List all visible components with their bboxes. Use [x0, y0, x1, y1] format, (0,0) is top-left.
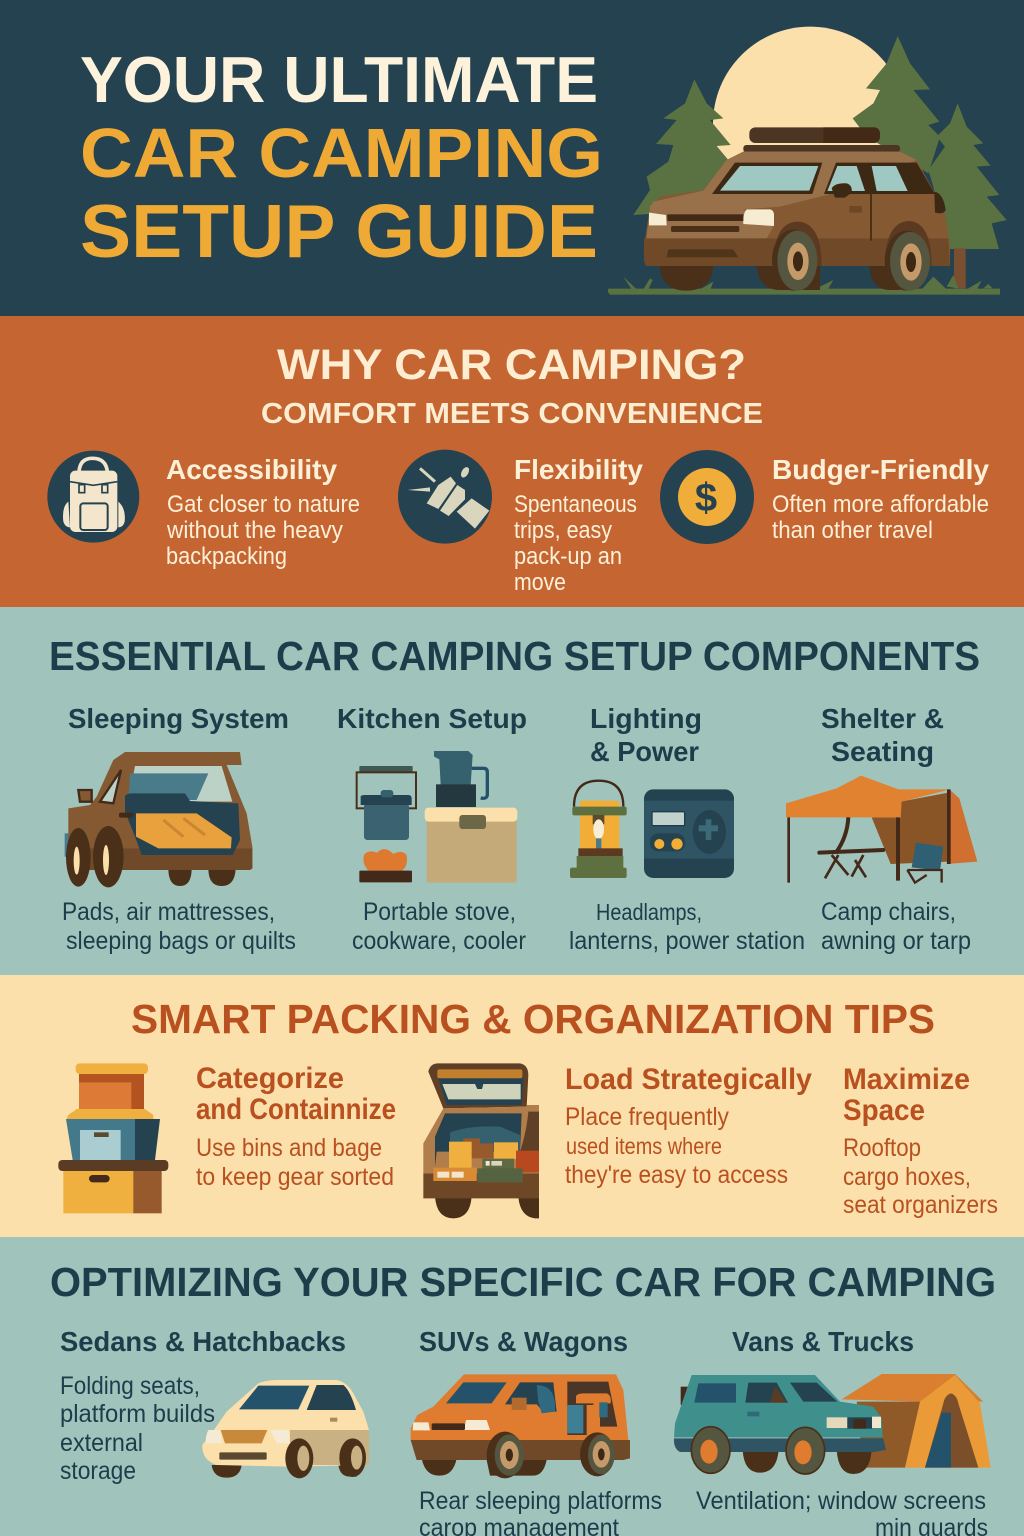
text: maximize space: Maximize	[843, 1063, 970, 1096]
icon: cream hatchback	[202, 1380, 369, 1478]
suvs and wagons	[411, 1326, 662, 1536]
text: maximize space	[843, 1063, 998, 1219]
text: categorize: to keep gear sorted	[196, 1163, 394, 1191]
text: sleeping caption	[62, 898, 296, 955]
text: accessibility: Gat closer to nature	[167, 491, 360, 518]
title: SETUP GUIDE	[80, 189, 598, 273]
text: suvs caption: Rear sleeping platforms	[419, 1487, 662, 1515]
icon: backpack	[47, 451, 139, 543]
lighting and power	[569, 703, 805, 955]
text: maximize space: cargo hoxes,	[843, 1163, 971, 1191]
text: vans caption	[696, 1487, 988, 1536]
title: CAR CAMPING	[80, 114, 603, 192]
text: budget friendly	[772, 454, 989, 544]
text: vans caption: Ventilation; window screens	[696, 1487, 986, 1515]
text: sleeping caption: sleeping bags or quilts	[66, 927, 296, 955]
text: load strategically	[565, 1063, 812, 1189]
subheading: COMFORT MEETS CONVENIENCE	[261, 398, 763, 430]
text: maximize space: Space	[843, 1094, 925, 1127]
text: load strategically: used items where	[566, 1133, 722, 1159]
icon: tent	[842, 1374, 991, 1468]
text: budget friendly: Budger-Friendly	[772, 454, 989, 485]
icon: lantern	[570, 781, 627, 878]
text: flexibility: Spentaneous	[514, 491, 637, 518]
text: categorize: Categorize	[196, 1062, 344, 1095]
icon: stacked bins	[58, 1063, 168, 1213]
heading: shelter and seating: Seating	[831, 736, 934, 767]
text: shelter caption: awning or tarp	[821, 927, 971, 955]
text: sedans caption: storage	[60, 1457, 136, 1485]
shelter and seating	[786, 703, 977, 955]
sedans and hatchbacks	[60, 1326, 369, 1485]
heading: sleeping system: Sleeping System	[68, 703, 289, 734]
text: flexibility	[514, 454, 643, 596]
text: categorize: Use bins and bage	[196, 1134, 382, 1162]
text: sleeping caption: Pads, air mattresses,	[62, 898, 275, 926]
kitchen setup	[337, 703, 527, 955]
panel: smart packing tips	[0, 975, 1024, 1237]
panel: essential components	[0, 607, 1024, 975]
icon: hand	[398, 450, 492, 544]
text: load strategically: they're easy to access	[565, 1161, 788, 1189]
icon: orange SUV	[411, 1374, 630, 1478]
heading: shelter and seating: Shelter &	[821, 703, 944, 734]
heading: kitchen setup: Kitchen Setup	[337, 703, 527, 734]
text: load strategically: Load Strategically	[565, 1063, 812, 1096]
text: suvs caption	[419, 1487, 662, 1536]
text: sedans caption: Folding seats,	[60, 1372, 200, 1400]
heading: why car camping: WHY CAR CAMPING?	[277, 341, 746, 389]
text: lighting caption: Headlamps,	[596, 899, 702, 925]
sleeping system	[62, 703, 296, 955]
heading: essential components: ESSENTIAL CAR CAMPING SETUP COMPONENTS	[49, 633, 980, 679]
icon: dollar coin: $	[695, 476, 717, 520]
text: sedans caption: external	[60, 1429, 143, 1457]
heading: vans: Vans & Trucks	[732, 1326, 914, 1357]
heading: smart packing: SMART PACKING & ORGANIZATION TIPS	[131, 996, 935, 1042]
icon: car with mattress	[65, 752, 252, 887]
heading: sedans: Sedans & Hatchbacks	[60, 1326, 346, 1357]
text: kitchen caption: cookware, cooler	[352, 927, 526, 955]
icon: open trunk	[423, 1063, 539, 1218]
heading: lighting and power	[590, 703, 702, 767]
title: YOUR ULTIMATE	[80, 43, 598, 116]
text: sedans caption	[60, 1372, 215, 1485]
text: lighting caption	[569, 899, 805, 955]
panel: optimizing your car	[0, 1237, 1024, 1536]
icon: stove, pot, pitcher and cooler	[357, 751, 517, 883]
text: shelter caption: Camp chairs,	[821, 898, 956, 926]
heading: lighting and power: Lighting	[590, 703, 702, 734]
text: accessibility: Accessibility	[166, 454, 337, 485]
text: maximize space: Rooftop	[843, 1134, 921, 1162]
text: flexibility: trips, easy	[514, 517, 612, 544]
icon: teal SUV	[674, 1375, 886, 1474]
text: categorize: and Containnize	[196, 1093, 396, 1126]
panel: why car camping	[0, 316, 1024, 607]
text: budget friendly: Often more affordable	[772, 491, 989, 518]
text: budget friendly: than other travel	[772, 517, 933, 544]
text: flexibility: move	[514, 569, 566, 596]
heading: optimizing: OPTIMIZING YOUR SPECIFIC CAR FOR CAMPING	[50, 1259, 996, 1305]
text: shelter caption	[821, 898, 971, 955]
icon: dollar coin	[660, 450, 754, 544]
text: flexibility: Flexibility	[514, 454, 643, 485]
vans and trucks	[674, 1326, 991, 1536]
heading: lighting and power: & Power	[590, 736, 699, 767]
panel: header	[0, 0, 1024, 316]
text: kitchen caption: Portable stove,	[363, 898, 516, 926]
icon: awning, table and chair	[786, 776, 977, 883]
title	[80, 43, 603, 273]
heading: shelter and seating	[821, 703, 944, 767]
text: sedans caption: platform builds	[60, 1400, 215, 1428]
text: load strategically: Place frequently	[565, 1103, 729, 1131]
heading: suvs: SUVs & Wagons	[419, 1326, 628, 1357]
text: kitchen caption	[352, 898, 526, 955]
text: flexibility: pack-up an	[514, 543, 622, 570]
text: accessibility	[166, 454, 360, 570]
text: accessibility: without the heavy	[166, 517, 343, 544]
text: maximize space: seat organizers	[843, 1191, 998, 1219]
text: categorize	[196, 1062, 396, 1191]
text: lighting caption: lanterns, power station	[569, 927, 805, 955]
icon: power station	[644, 789, 734, 878]
text: accessibility: backpacking	[166, 543, 287, 570]
hero illustration: SUV, sun and pine trees	[608, 27, 1007, 295]
